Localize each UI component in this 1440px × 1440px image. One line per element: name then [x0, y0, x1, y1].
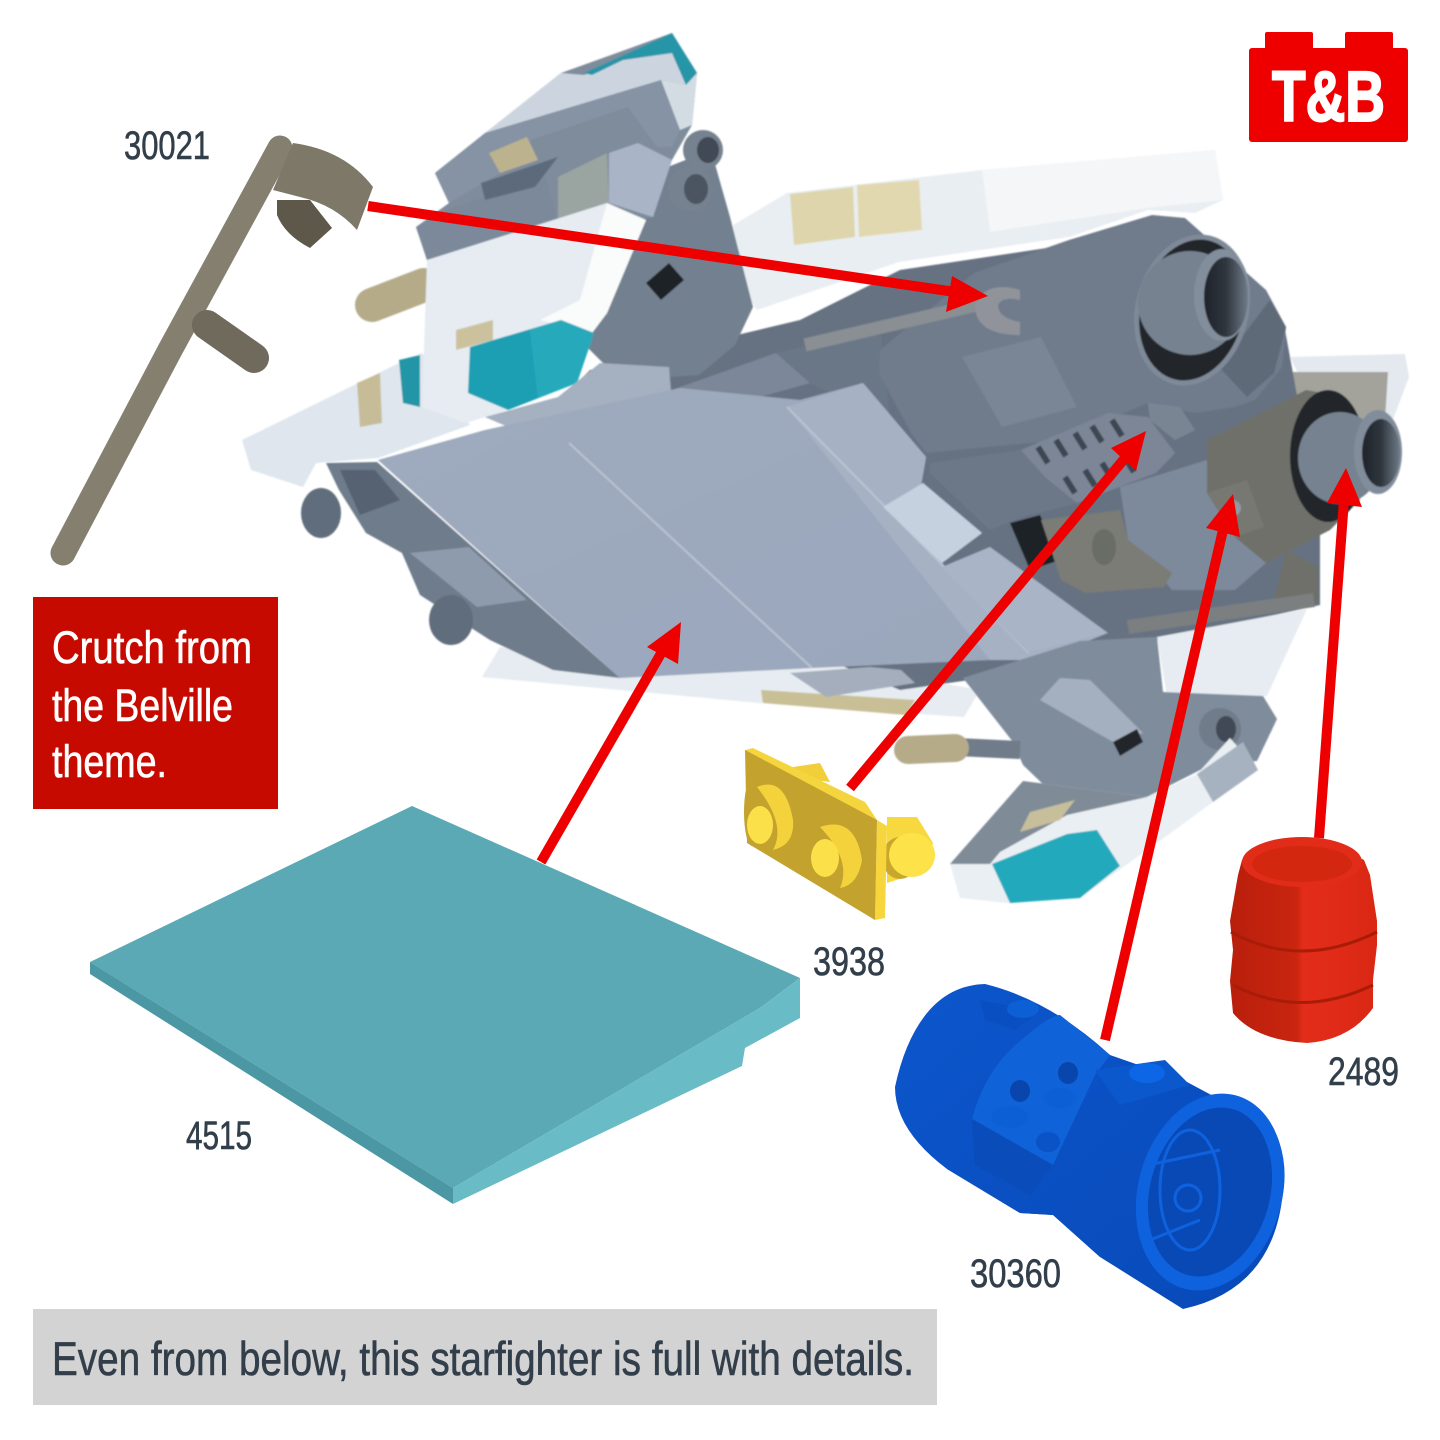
- label 3938: 3938: [813, 940, 885, 984]
- lower right white block: [1157, 609, 1307, 696]
- label 30021: 30021: [124, 124, 210, 168]
- label 2489: 2489: [1328, 1050, 1399, 1094]
- lower tan rod: [908, 747, 1020, 750]
- arrow: 30021 to crutch: [368, 206, 988, 312]
- rear white wing: [1290, 354, 1409, 440]
- logo: T&amp;B brick: T&B: [1272, 58, 1385, 137]
- engine lower hull: [930, 450, 1077, 570]
- lower-left white wing: [242, 353, 470, 487]
- engine 2: [1041, 390, 1402, 603]
- callout: Belville crutch: Crutch from: [52, 622, 252, 673]
- caption bar: Even from below, this starfighter is full with details.: [52, 1332, 914, 1385]
- dome turret: [580, 150, 753, 380]
- part 30021: crutch: [63, 143, 373, 553]
- hull base silhouette: [560, 240, 1320, 690]
- part 30360: blue cylinder: [895, 984, 1305, 1309]
- label 30360: 30360: [970, 1252, 1061, 1296]
- arrow: 2489 to nozzle: [1319, 468, 1362, 838]
- left under-structure: [301, 462, 620, 678]
- white fin block: [422, 203, 646, 423]
- lower fin body: [963, 637, 1277, 797]
- lower fin wing: [950, 738, 1258, 903]
- part 3938: yellow hinge: [744, 748, 935, 920]
- arrow: 4515 to panel: [541, 622, 681, 862]
- callout: Belville crutch: [33, 597, 278, 809]
- label 4515: 4515: [186, 1114, 252, 1158]
- callout: Belville crutch: theme.: [52, 736, 167, 787]
- large wedge panel: [378, 383, 1108, 697]
- crutch on hull: [805, 287, 1020, 345]
- rear rod: [1128, 600, 1314, 627]
- hinge linkage: [485, 330, 890, 437]
- lower white strip: [482, 647, 980, 717]
- upper white wing: [730, 150, 1223, 310]
- part 4515: teal slope: [90, 806, 800, 1204]
- logo: T&amp;B brick: [1249, 32, 1408, 142]
- starfighter model: [242, 33, 1409, 903]
- callout: Belville crutch: the Belville: [52, 680, 233, 731]
- part 2489: red barrel: [1230, 837, 1377, 1043]
- arrow: 3938 to bracket: [850, 431, 1146, 788]
- caption bar: [33, 1309, 937, 1405]
- slotted bracket: [1021, 403, 1195, 503]
- top fin: [416, 33, 697, 260]
- tan rod: [372, 285, 424, 305]
- engine 1 body: [879, 215, 1286, 453]
- arrow: 30360 to engine pin: [1105, 494, 1240, 1040]
- fin studs: [668, 130, 723, 211]
